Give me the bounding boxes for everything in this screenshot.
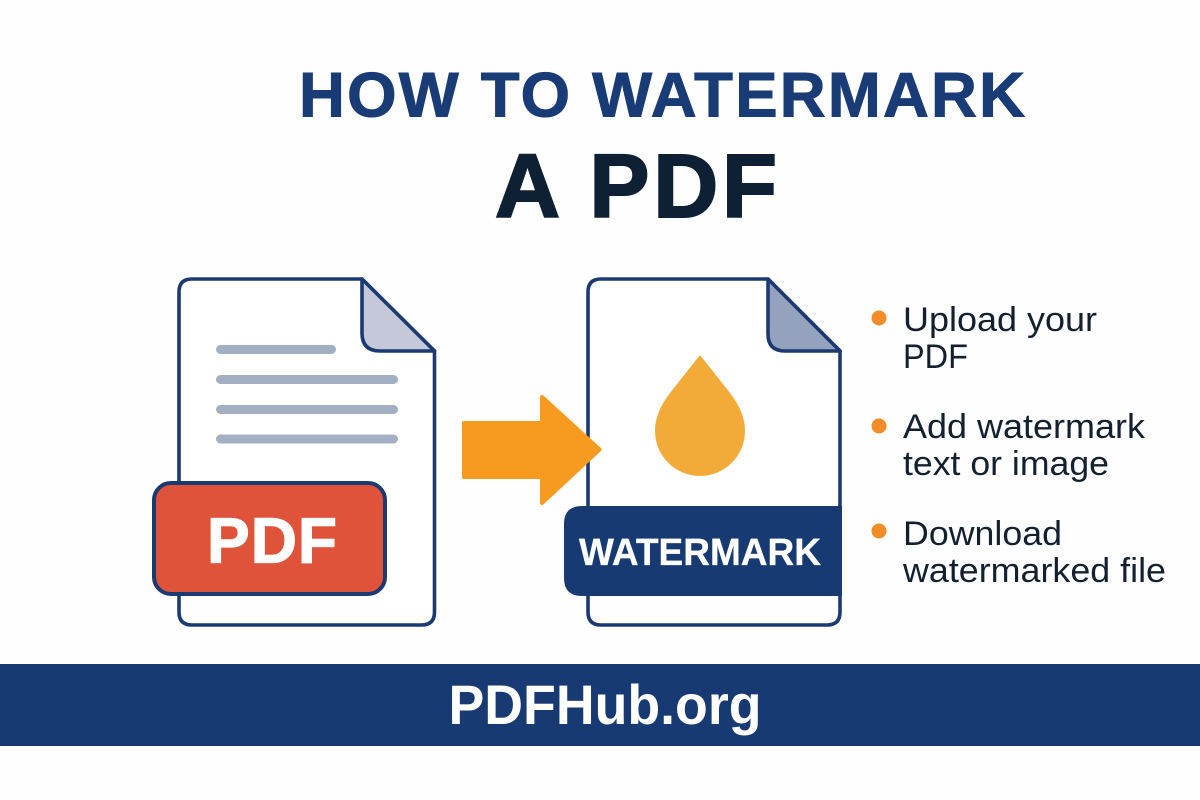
title line 2: A PDF: [495, 137, 777, 237]
document text lines: [216, 345, 398, 444]
footer band: PDFHub.org: [448, 673, 762, 736]
step 1: [872, 301, 1097, 376]
arrow: [464, 397, 600, 503]
PDF badge: [154, 483, 385, 594]
step 1: PDF: [903, 338, 968, 376]
step 2: text or image: [903, 445, 1109, 483]
watermark banner: [564, 506, 842, 596]
step 3: watermarked file: [902, 552, 1166, 590]
step 2: [872, 408, 1146, 483]
step 2: Add watermark: [903, 408, 1146, 446]
step 1: Upload your: [903, 301, 1097, 339]
step 3: Download: [903, 515, 1062, 553]
icon: source PDF document: [154, 279, 434, 625]
icon: water drop: [655, 355, 745, 476]
title line 1: HOW TO WATERMARK: [299, 60, 1025, 130]
step 3: [872, 515, 1166, 590]
icon: watermarked document: [564, 279, 842, 625]
PDF badge: PDF: [207, 504, 337, 576]
footer band: [0, 664, 1200, 746]
watermark banner: WATERMARK: [579, 532, 822, 574]
step list: [872, 301, 1166, 590]
